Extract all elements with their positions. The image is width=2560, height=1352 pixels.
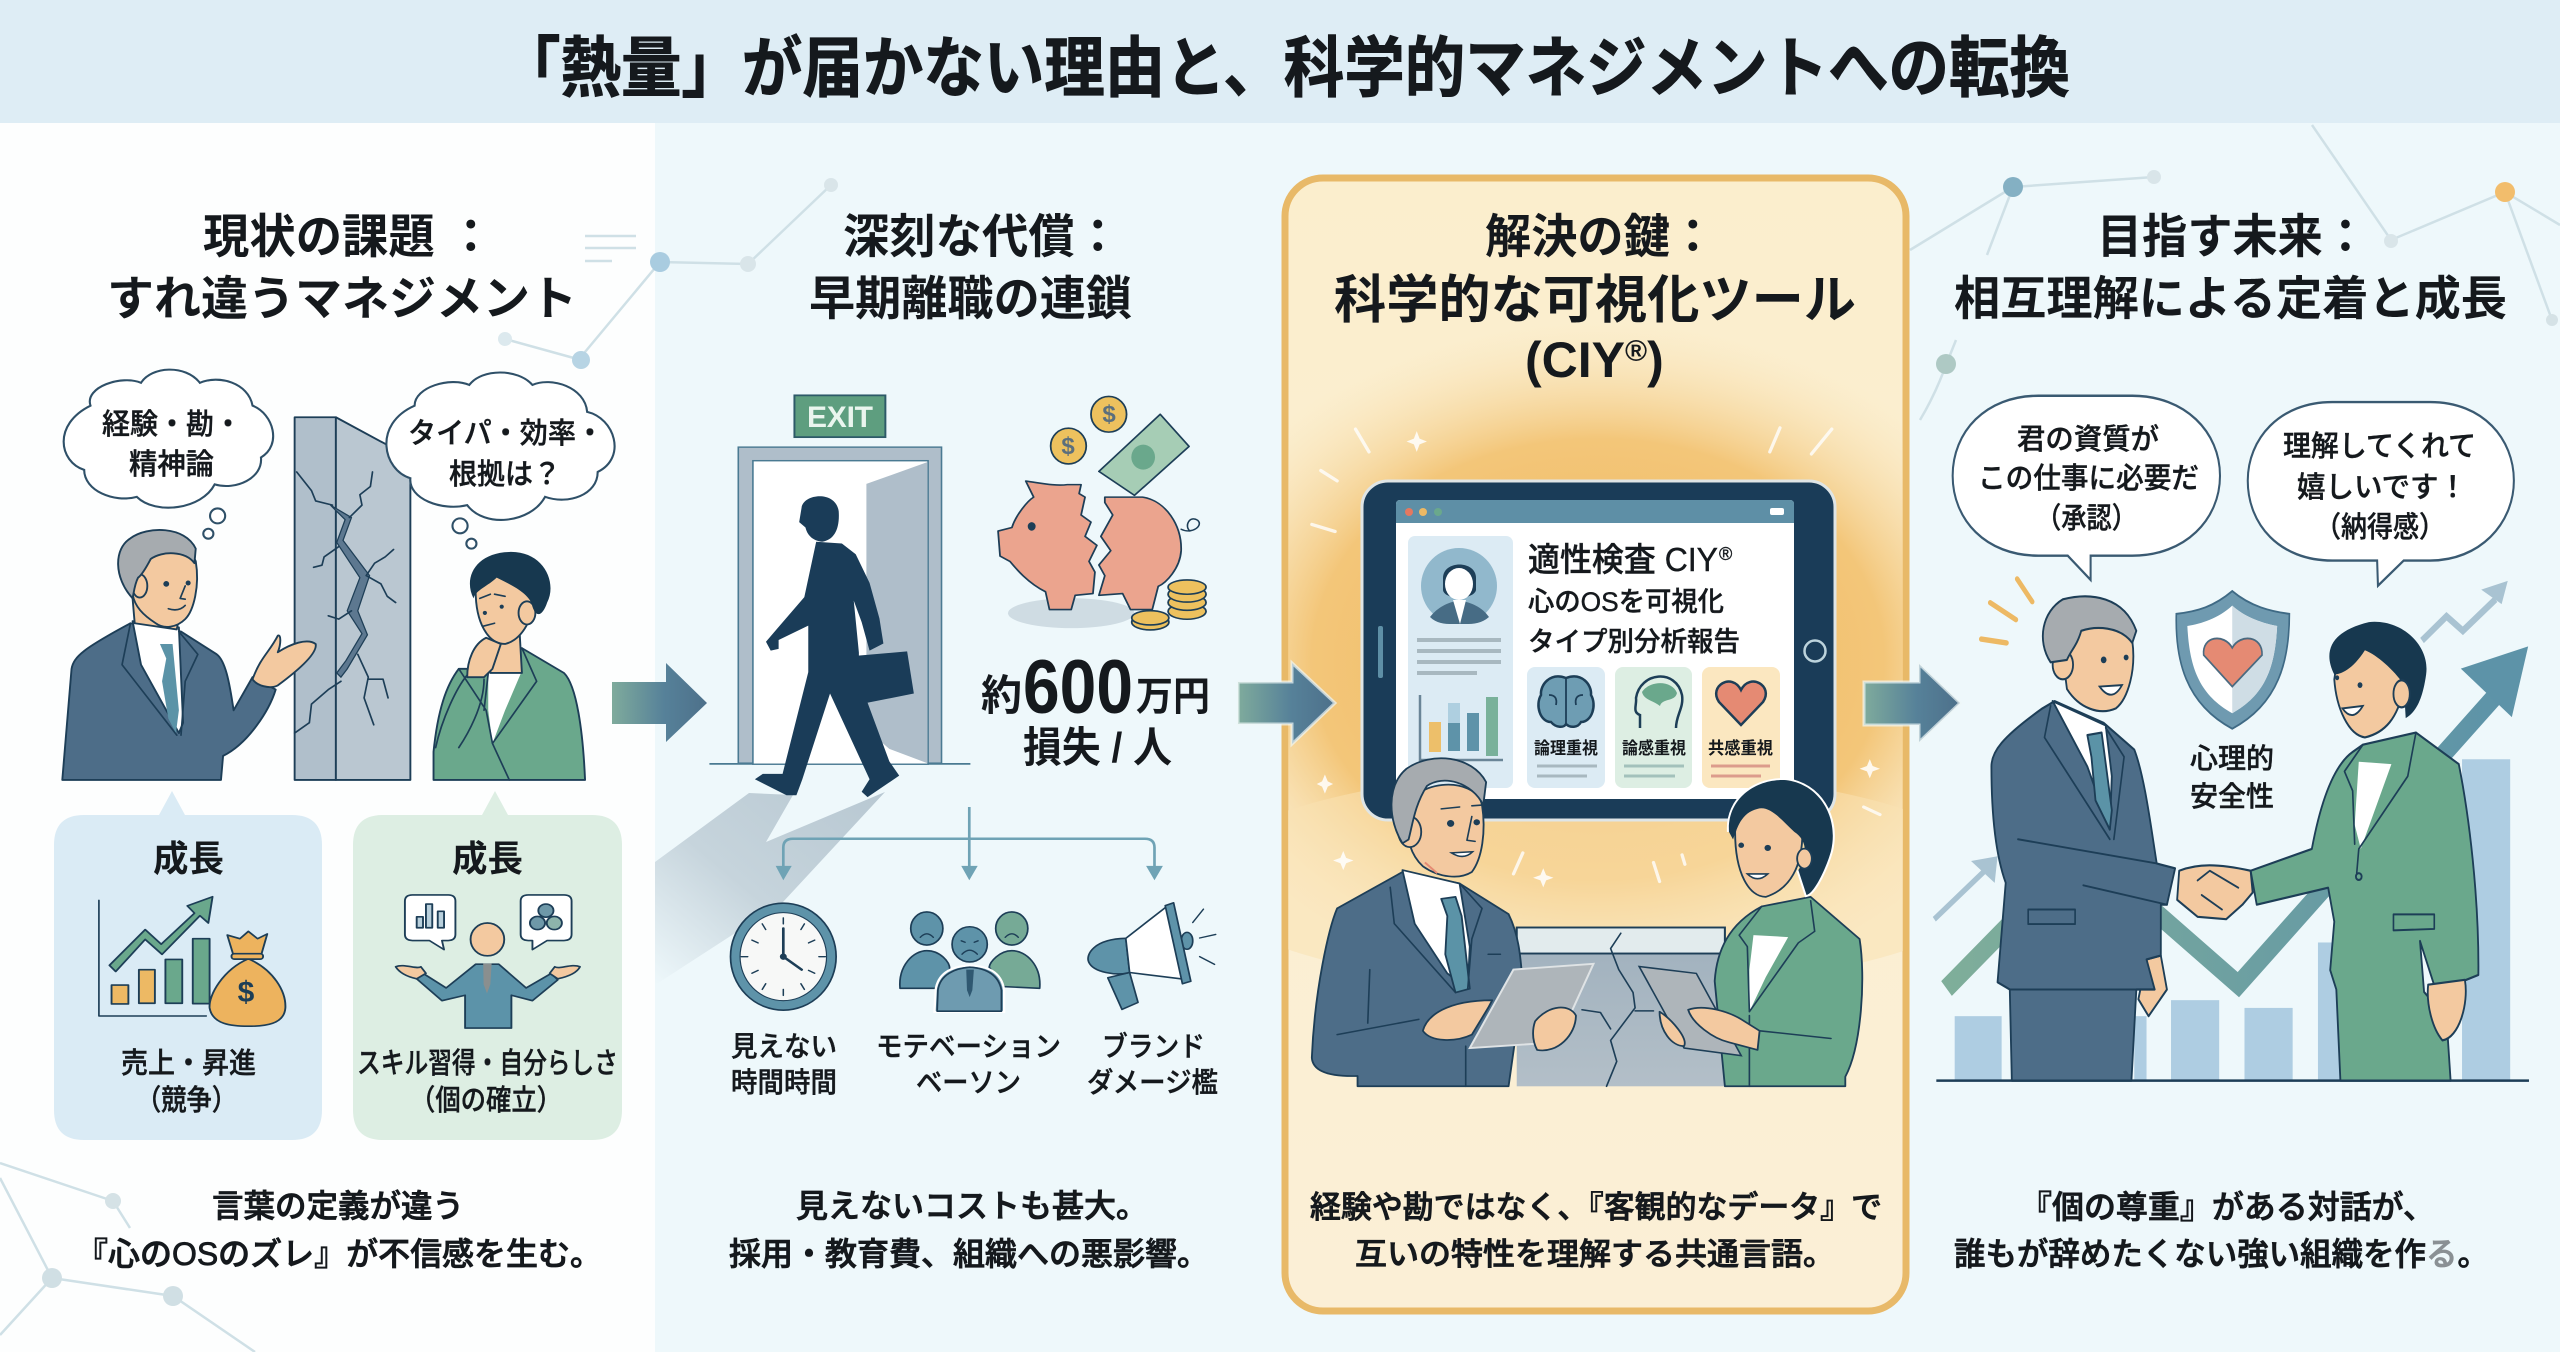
panel: serious cost xyxy=(655,210,1218,1272)
illustration: broken piggy bank: $ xyxy=(1061,433,1075,460)
caption: current issues: 言葉の定義が違う xyxy=(212,1188,464,1224)
header band xyxy=(0,0,2560,123)
screen text: 適性検査 CIY xyxy=(1528,541,1718,578)
icon: megaphone xyxy=(1088,903,1216,1009)
text: manager thought xyxy=(102,408,242,481)
panel: current issues xyxy=(54,210,622,1272)
icon: person with speech boxes xyxy=(396,895,580,1028)
card: growth as sales and promotion: 成長 xyxy=(153,838,224,879)
arrow: issues to cost xyxy=(612,663,707,742)
panel: target future xyxy=(1934,210,2529,1272)
heading: target future: 目指す未来： xyxy=(2097,210,2368,263)
heading: current issues xyxy=(107,210,577,325)
heading: solution key: 解決の鍵： xyxy=(1485,210,1716,263)
stat: 6 million yen loss per person: 損失 / 人 xyxy=(1023,724,1172,771)
labels: hidden costs: ブランド xyxy=(1102,1031,1205,1062)
labels: hidden costs xyxy=(731,1031,1218,1098)
card: growth as skills and self: スキル習得・自分らしさ xyxy=(357,1047,618,1080)
sparkles xyxy=(1312,428,1880,887)
stat: 6 million yen loss per person: 600 xyxy=(1023,645,1133,730)
type card: emotion xyxy=(1615,667,1692,788)
labels: hidden costs: 時間時間 xyxy=(731,1067,837,1098)
illustration: broken piggy bank xyxy=(998,396,1206,630)
card: growth as sales and promotion: 売上・昇進 xyxy=(121,1047,256,1080)
illustration: broken piggy bank: $ xyxy=(1102,401,1116,428)
type card: empathy xyxy=(1702,667,1780,788)
text: employee thought: 根拠は？ xyxy=(449,458,561,491)
shield: psychological safety xyxy=(2176,591,2289,729)
caption: current issues: 『心のOSのズレ』が不信感を生む。 xyxy=(76,1236,602,1272)
text: manager thought: 経験・勘・ xyxy=(102,408,242,441)
stat: 6 million yen loss per person: 約 xyxy=(981,672,1022,719)
figure: employee xyxy=(1639,780,1862,1086)
heading: serious cost xyxy=(809,210,1132,325)
illustration: growth chart with handshake xyxy=(1934,396,2529,1081)
caption: serious cost: 見えないコストも甚大。 xyxy=(796,1188,1148,1224)
caption: serious cost xyxy=(729,1188,1209,1272)
text: manager thought: 精神論 xyxy=(129,448,214,481)
title: 「熱量」が届かない理由と、科学的マネジメントへの転換 xyxy=(500,31,2070,105)
text: employee speech: 嬉しいです！ xyxy=(2297,471,2467,504)
speech bubble: manager xyxy=(1953,396,2220,580)
tablet report screen xyxy=(1362,481,1835,820)
branching arrows xyxy=(776,807,1163,880)
caption: target future: 誰もが辞めたくない強い組織を作る。 xyxy=(1954,1236,2489,1272)
icon: rising chart with money bag xyxy=(99,897,285,1026)
card: growth as skills and self xyxy=(353,791,622,1140)
caption: solution key: 互いの特性を理解する共通言語。 xyxy=(1355,1237,1835,1272)
type card: empathy: 共感重視 xyxy=(1708,738,1773,758)
text: manager speech: 君の資質が xyxy=(2017,423,2159,456)
silhouette xyxy=(755,496,914,797)
text: manager speech xyxy=(1978,423,2199,535)
screen text xyxy=(1528,541,1740,657)
card: growth as skills and self: （個の確立） xyxy=(410,1084,562,1117)
labels: hidden costs: 見えない xyxy=(731,1031,837,1062)
avatar xyxy=(1421,548,1497,624)
caption: solution key xyxy=(1310,1190,1882,1272)
heading: solution key: ) xyxy=(1647,332,1664,388)
heading: solution key: 科学的な可視化ツール xyxy=(1334,272,1856,330)
heading: target future xyxy=(1954,210,2507,325)
text: psychological safety: 心理的 xyxy=(2190,743,2274,774)
arrow: solution to future xyxy=(1864,664,1960,742)
text: employee speech xyxy=(2283,430,2476,544)
heading: solution key: (CIY xyxy=(1525,332,1625,388)
figure: manager shaking hands xyxy=(1991,596,2175,1081)
arrow: cost to solution xyxy=(1238,663,1335,744)
type card: logic: 論理重視 xyxy=(1534,739,1598,758)
heading: solution key xyxy=(1334,210,1856,388)
text: psychological safety xyxy=(2190,743,2274,812)
type card: logic xyxy=(1527,667,1605,788)
text: manager speech: この仕事に必要だ xyxy=(1978,462,2199,495)
card: growth as sales and promotion: $ xyxy=(238,976,255,1009)
heading: solution key: ® xyxy=(1625,335,1647,368)
illustration: person leaving through exit: EXIT xyxy=(807,401,873,434)
exit door xyxy=(709,395,970,764)
mini bar chart xyxy=(1420,695,1503,760)
caption: solution key: 経験や勘ではなく、『客観的なデータ』で xyxy=(1310,1190,1882,1225)
heading: current issues: 現状の課題 ： xyxy=(203,210,494,263)
text: manager speech: （承認） xyxy=(2036,503,2137,535)
caption: current issues xyxy=(76,1188,602,1272)
floor shadow xyxy=(655,792,885,985)
icon: unhappy team xyxy=(900,912,1040,1012)
figure: employee shaking hands xyxy=(2251,622,2478,1081)
speech bubble: employee xyxy=(2248,402,2514,586)
screen text: 心のOSを可視化 xyxy=(1528,587,1724,617)
illustration: manager and employee using tablets xyxy=(1312,758,1862,1086)
card: growth as sales and promotion: （競争） xyxy=(136,1084,237,1117)
caption: target future: 『個の尊重』がある対話が、 xyxy=(2020,1189,2435,1225)
illustration: manager and young employee split by cracked wall xyxy=(62,370,615,780)
type card: emotion: 論感重視 xyxy=(1622,738,1686,758)
left column background xyxy=(0,123,655,1352)
thought cloud: employee xyxy=(386,372,615,549)
icon: clock xyxy=(731,903,836,1010)
handshake xyxy=(2177,865,2253,919)
panel: solution key xyxy=(1282,174,1910,1314)
growth bars and arrows xyxy=(1934,581,2529,1081)
screen text: ® xyxy=(1719,544,1732,564)
labels: hidden costs: ベーソン xyxy=(916,1067,1021,1098)
figure: young employee xyxy=(434,552,585,780)
labels: hidden costs: モテベーション xyxy=(876,1031,1061,1062)
heading: serious cost: 早期離職の連鎖 xyxy=(809,272,1132,325)
glow behind tablet xyxy=(1288,347,1903,962)
caption: serious cost: 採用・教育費、組織への悪影響。 xyxy=(729,1236,1209,1272)
heading: target future: 相互理解による定着と成長 xyxy=(1954,272,2507,325)
caption: target future xyxy=(1954,1189,2489,1272)
figure: older manager xyxy=(62,530,316,780)
card: growth as sales and promotion xyxy=(54,791,322,1140)
text: employee speech: 理解してくれて xyxy=(2283,430,2476,463)
illustration: person leaving through exit xyxy=(655,395,970,985)
thought cloud: manager xyxy=(64,370,273,539)
stat: 6 million yen loss per person: 万円 xyxy=(1136,675,1210,719)
heading: current issues: すれ違うマネジメント xyxy=(107,272,577,325)
ticks near manager xyxy=(1981,579,2032,643)
figure: manager xyxy=(1312,758,1593,1086)
text: employee thought xyxy=(408,417,604,491)
stat: 6 million yen loss per person xyxy=(981,645,1210,771)
heading: serious cost: 深刻な代償： xyxy=(843,210,1121,263)
cracked wall now bridged xyxy=(1517,927,1725,1086)
text: employee speech: （納得感） xyxy=(2315,511,2445,544)
screen text: タイプ別分析報告 xyxy=(1528,627,1740,657)
text: psychological safety: 安全性 xyxy=(2190,781,2274,812)
cracked wall xyxy=(295,417,410,780)
labels: hidden costs: ダメージ檻 xyxy=(1087,1067,1218,1098)
text: employee thought: タイパ・効率・ xyxy=(408,417,604,450)
card: growth as skills and self: 成長 xyxy=(452,838,523,879)
